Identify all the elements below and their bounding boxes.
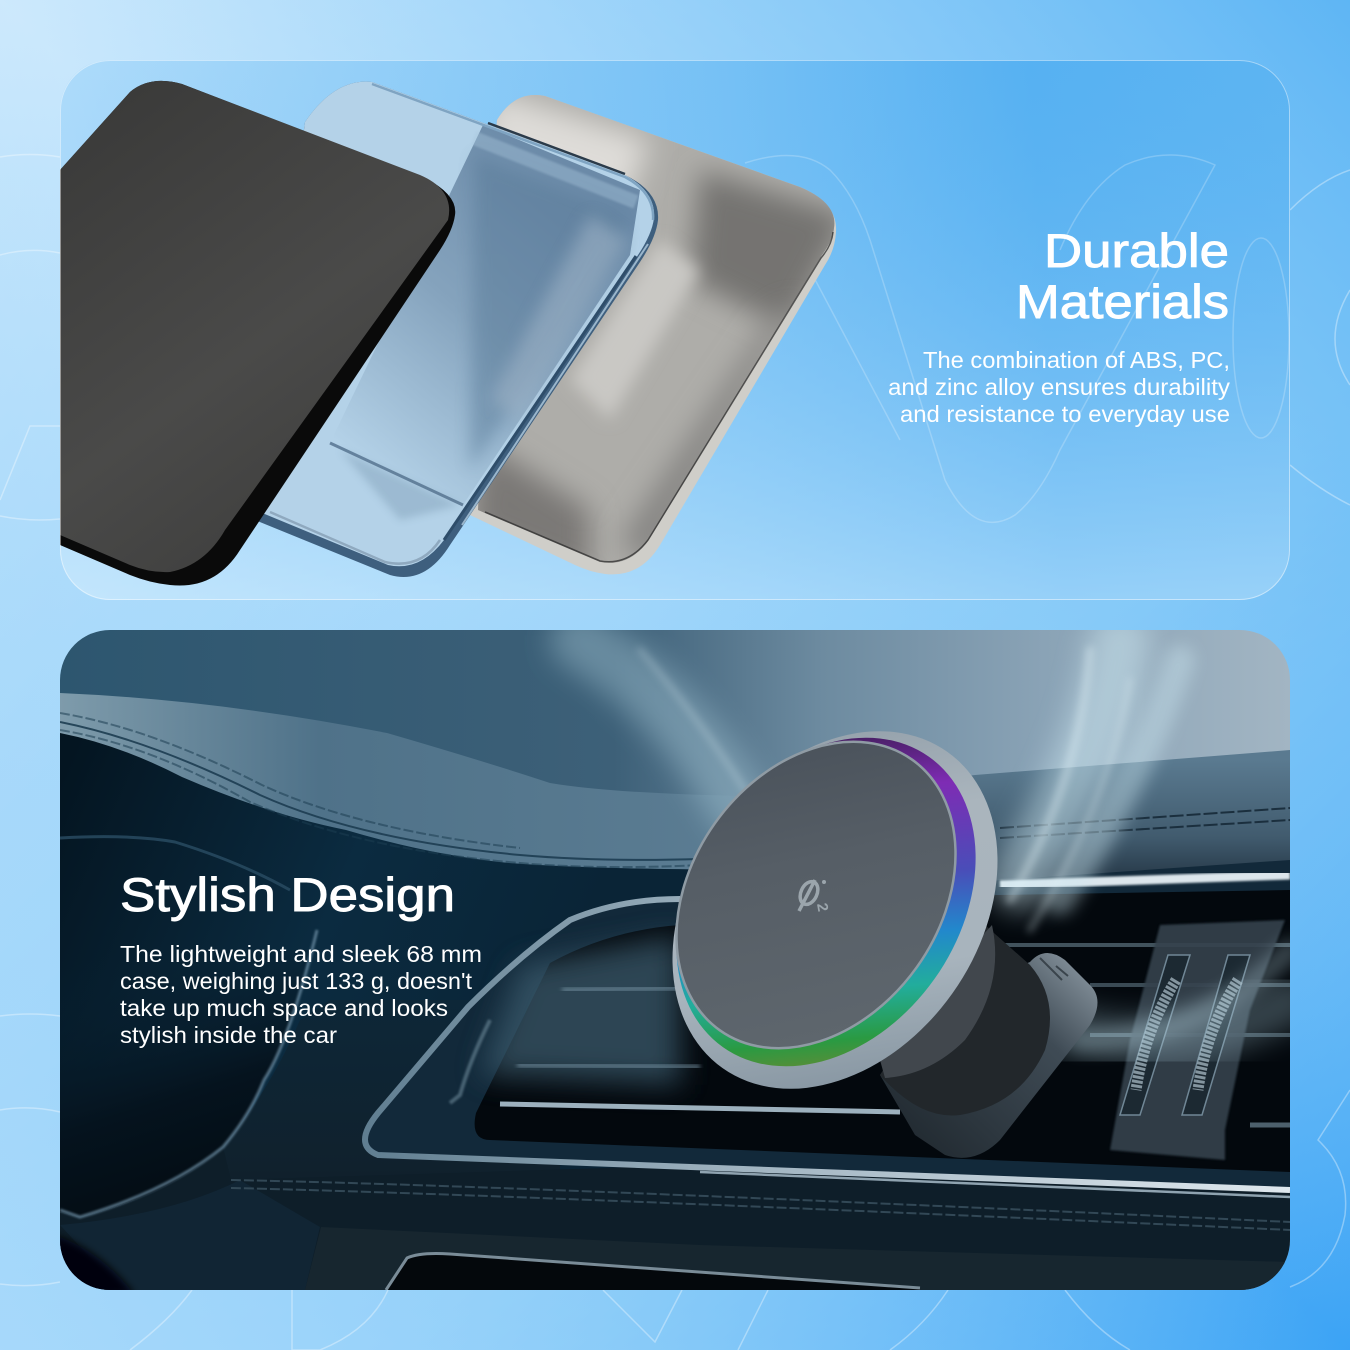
description: stylish design: stylish inside the car [120,1022,337,1048]
description: durable materials [888,347,1231,427]
metal plate [470,90,850,580]
instrument shroud [60,950,310,1217]
vent opening [475,890,1290,1172]
rgb light ring [614,680,1038,1124]
description: stylish design: take up much space and looks [120,995,448,1021]
description: stylish design: case, weighing just 133 g, doesn't [120,968,473,994]
heading: durable materials: Durable [1044,224,1229,277]
dash mid area [224,1015,560,1180]
center vent blade [1110,920,1285,1160]
dashboard lower body [60,733,688,1200]
disc face [619,688,1013,1102]
heading: stylish design: Stylish Design [120,868,455,921]
description: stylish design [120,941,482,1048]
lower trim stitching [231,1180,1290,1230]
panel watermark outlines [745,155,1289,522]
heading: durable materials: Materials [1016,275,1229,328]
mount clip base [880,953,1098,1158]
description: durable materials: and resistance to everyday use [900,401,1230,427]
qi2 logo: 2 [813,902,831,913]
air streaks [580,640,1290,1041]
vent slats [500,945,1290,1125]
panel: durable materials [60,60,1290,600]
vent chrome trim [365,875,1290,1197]
mount cylinder [880,925,1050,1116]
glass plate [250,82,658,577]
description: stylish design: The lightweight and sleek 68 mm [120,941,482,967]
panel: stylish design [55,630,1290,1295]
dashboard top surface [60,693,708,869]
shroud edge highlight [60,930,317,1217]
charger disc [605,668,1065,1152]
vent inner blade [450,1020,490,1103]
description: durable materials: and zinc alloy ensures durability [888,374,1231,400]
qi2 logo [797,879,831,913]
cluster hood line [60,837,290,890]
windshield backdrop [60,630,1290,1290]
dashboard stitching [60,713,700,867]
right dashboard top [972,750,1290,880]
lower trim [60,1147,1290,1290]
vent surround [366,860,1290,1188]
carbon panel and glove box [305,1227,1290,1290]
left air blur [480,935,680,1085]
disc outer rim [605,668,1065,1152]
description: durable materials: The combination of ABS, PC, [923,347,1230,373]
black plate [60,81,455,586]
heading: durable materials [1020,232,1228,319]
